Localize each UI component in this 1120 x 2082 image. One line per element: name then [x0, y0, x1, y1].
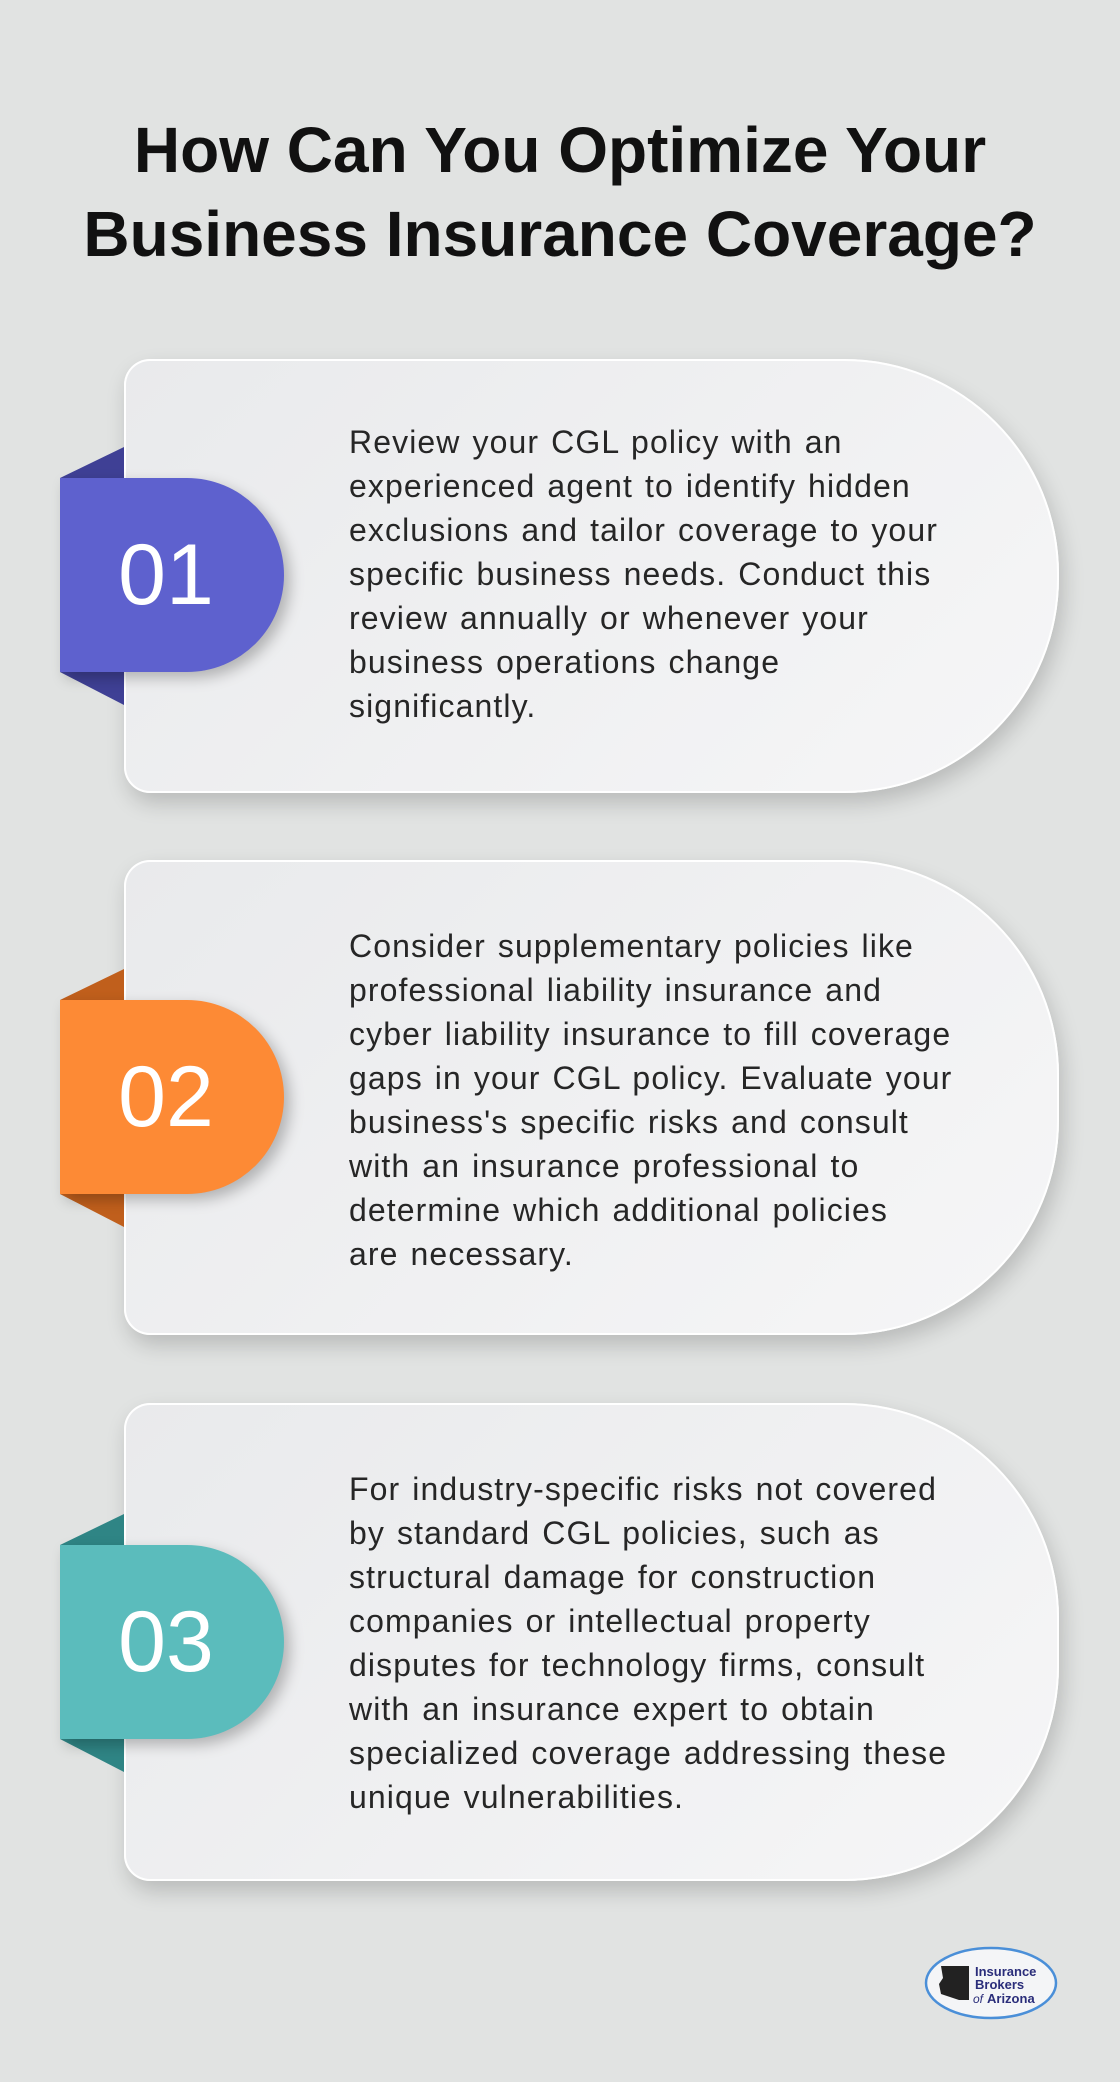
logo: Brokers [975, 1977, 1024, 1992]
panel: step 3 [124, 1403, 1059, 1881]
text: step 2: cyber liability insurance to fill coverage [349, 1016, 951, 1052]
badge 02: 02 [118, 1049, 214, 1145]
text: step 3: disputes for technology firms, consult [349, 1647, 925, 1683]
text: step 2 [349, 928, 952, 1272]
panel: step 2 [124, 860, 1059, 1335]
text: step 3: by standard CGL policies, such as [349, 1515, 880, 1551]
text: step 3 [349, 1471, 947, 1815]
fold: step 3 [60, 1514, 124, 1772]
fold: step 2 [60, 969, 124, 1227]
text: step 2: Consider supplementary policies like [349, 928, 914, 964]
text: step 3: specialized coverage addressing these [349, 1735, 947, 1771]
text: step 1: exclusions and tailor coverage to your [349, 512, 938, 548]
text: step 1: significantly. [349, 688, 536, 724]
text: step 1: Review your CGL policy with an [349, 424, 843, 460]
text: step 1 [349, 424, 938, 724]
logo: Insurance [975, 1964, 1036, 1979]
text: step 2: gaps in your CGL policy. Evaluate your [349, 1060, 952, 1096]
logo: of [973, 1992, 985, 2006]
text: step 1: review annually or whenever your [349, 600, 869, 636]
logo [924, 1946, 1058, 2020]
text: step 3: structural damage for construction [349, 1559, 876, 1595]
text: step 3: companies or intellectual property [349, 1603, 871, 1639]
panel: step 1 [124, 359, 1059, 793]
text: step 1: experienced agent to identify hidden [349, 468, 911, 504]
text: step 1: business operations change [349, 644, 780, 680]
fold: step 1 [60, 447, 124, 705]
badge 03: 03 [118, 1594, 214, 1690]
title: Business Insurance Coverage? [83, 198, 1037, 270]
text: step 3: unique vulnerabilities. [349, 1779, 684, 1815]
title: How Can You Optimize Your [134, 114, 986, 186]
text: step 3: For industry-specific risks not covered [349, 1471, 937, 1507]
text: step 2: determine which additional policies [349, 1192, 888, 1228]
text: step 1: specific business needs. Conduct this [349, 556, 931, 592]
badge 01: 01 [118, 527, 214, 623]
title [83, 114, 1037, 270]
text: step 2: professional liability insurance and [349, 972, 882, 1008]
text: step 2: are necessary. [349, 1236, 574, 1272]
logo: Arizona [987, 1991, 1035, 2006]
text: step 2: with an insurance professional to [349, 1148, 859, 1184]
text: step 2: business's specific risks and consult [349, 1104, 909, 1140]
text: step 3: with an insurance expert to obtain [349, 1691, 875, 1727]
